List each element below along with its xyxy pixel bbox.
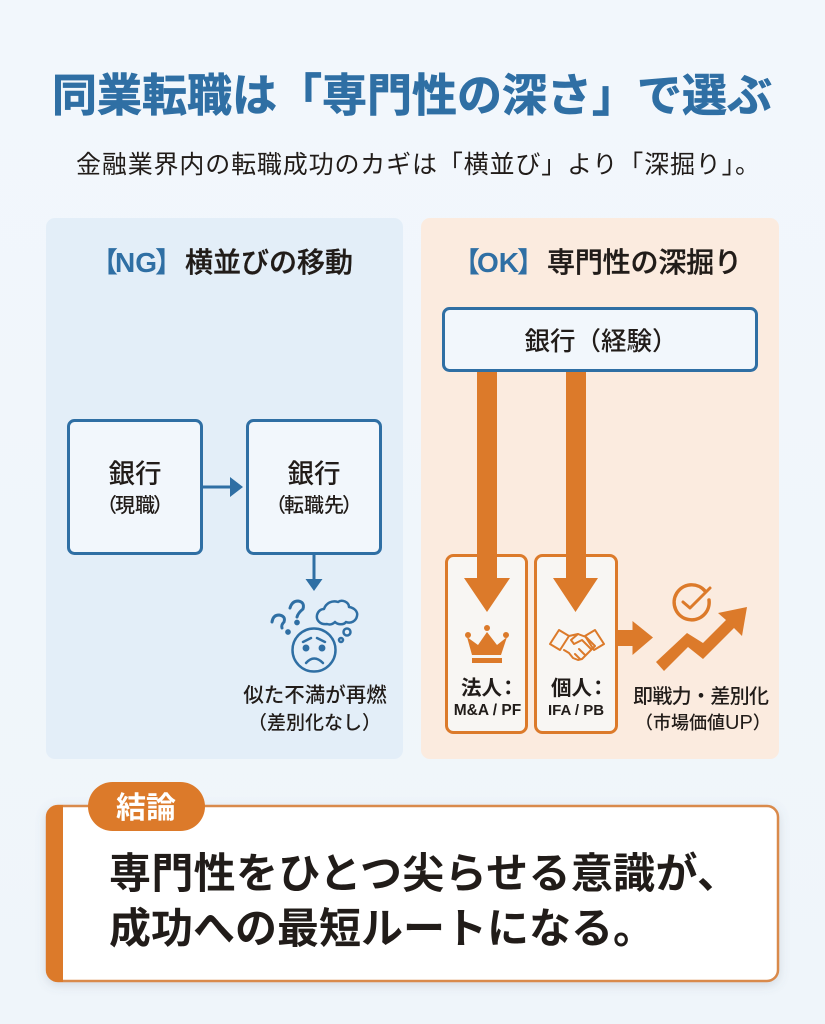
icon: check circle	[674, 585, 710, 620]
box: bank experience	[444, 308, 756, 370]
arrow: bank to individual	[553, 371, 598, 612]
icon: worried face with question marks and thought cloud	[272, 601, 357, 672]
OK panel heading: 【	[452, 247, 480, 278]
box: destination bank: 転職先	[284, 494, 344, 517]
card: corporate: M&A / PF	[454, 702, 521, 719]
caption: outcome	[633, 685, 771, 734]
caption: outcome: 即戦力・差別化	[633, 685, 769, 708]
box: current bank	[68, 420, 202, 554]
panel: NG lateral move	[46, 218, 403, 759]
arrow: lateral move	[203, 477, 243, 497]
icon: handshake	[550, 630, 604, 660]
icon: crown	[465, 625, 509, 663]
arrow: bank to corporate	[464, 371, 510, 612]
conclusion box	[46, 782, 778, 982]
card: individual: IFA / PB	[548, 702, 604, 719]
card: individual: 個人：	[551, 677, 608, 700]
box: current bank: 現職	[115, 494, 155, 517]
conclusion badge	[88, 782, 205, 831]
box: destination bank	[248, 420, 380, 554]
box: current bank: 銀行	[108, 459, 162, 489]
OK panel heading: OK	[477, 247, 519, 278]
box: destination bank: （	[266, 494, 286, 517]
panel: OK specialization	[421, 218, 779, 759]
icon: rising zigzag arrow	[656, 607, 747, 671]
card: corporate: 法人：	[461, 677, 518, 700]
box: current bank: （	[97, 494, 117, 517]
title: 同業転職は「専門性の深さ」で選ぶ	[52, 70, 772, 121]
caption: dissatisfaction recurs: （差別化なし）	[248, 712, 381, 734]
NG panel heading: 【	[90, 247, 118, 278]
conclusion text	[109, 850, 739, 952]
arrow: down to dissatisfaction	[306, 554, 322, 591]
card: corporate	[446, 556, 526, 732]
conclusion text: 専門性をひとつ尖らせる意識が、	[109, 850, 739, 897]
conclusion badge: 結論	[116, 792, 176, 825]
NG panel heading: 】	[155, 247, 183, 278]
NG panel heading: NG	[115, 247, 157, 278]
box: destination bank: ）	[342, 494, 362, 517]
box: destination bank: 銀行	[288, 459, 340, 489]
caption: outcome: （市場価値UP）	[635, 712, 771, 734]
NG panel heading	[90, 247, 353, 278]
caption: dissatisfaction recurs	[243, 684, 387, 734]
subtitle: 金融業界内の転職成功のカギは「横並び」より「深掘り」。	[76, 151, 760, 179]
OK panel heading: 専門性の深掘り	[547, 247, 742, 278]
conclusion text: 成功への最短ルートになる。	[109, 905, 655, 952]
NG panel heading: 横並びの移動	[185, 247, 353, 278]
box: current bank: ）	[153, 494, 173, 517]
OK panel heading: 】	[517, 247, 545, 278]
card: individual	[536, 556, 616, 732]
OK panel heading	[452, 247, 742, 278]
caption: dissatisfaction recurs: 似た不満が再燃	[243, 684, 387, 707]
box: bank experience: 銀行（経験）	[524, 328, 678, 356]
arrow: to outcome	[617, 621, 653, 655]
